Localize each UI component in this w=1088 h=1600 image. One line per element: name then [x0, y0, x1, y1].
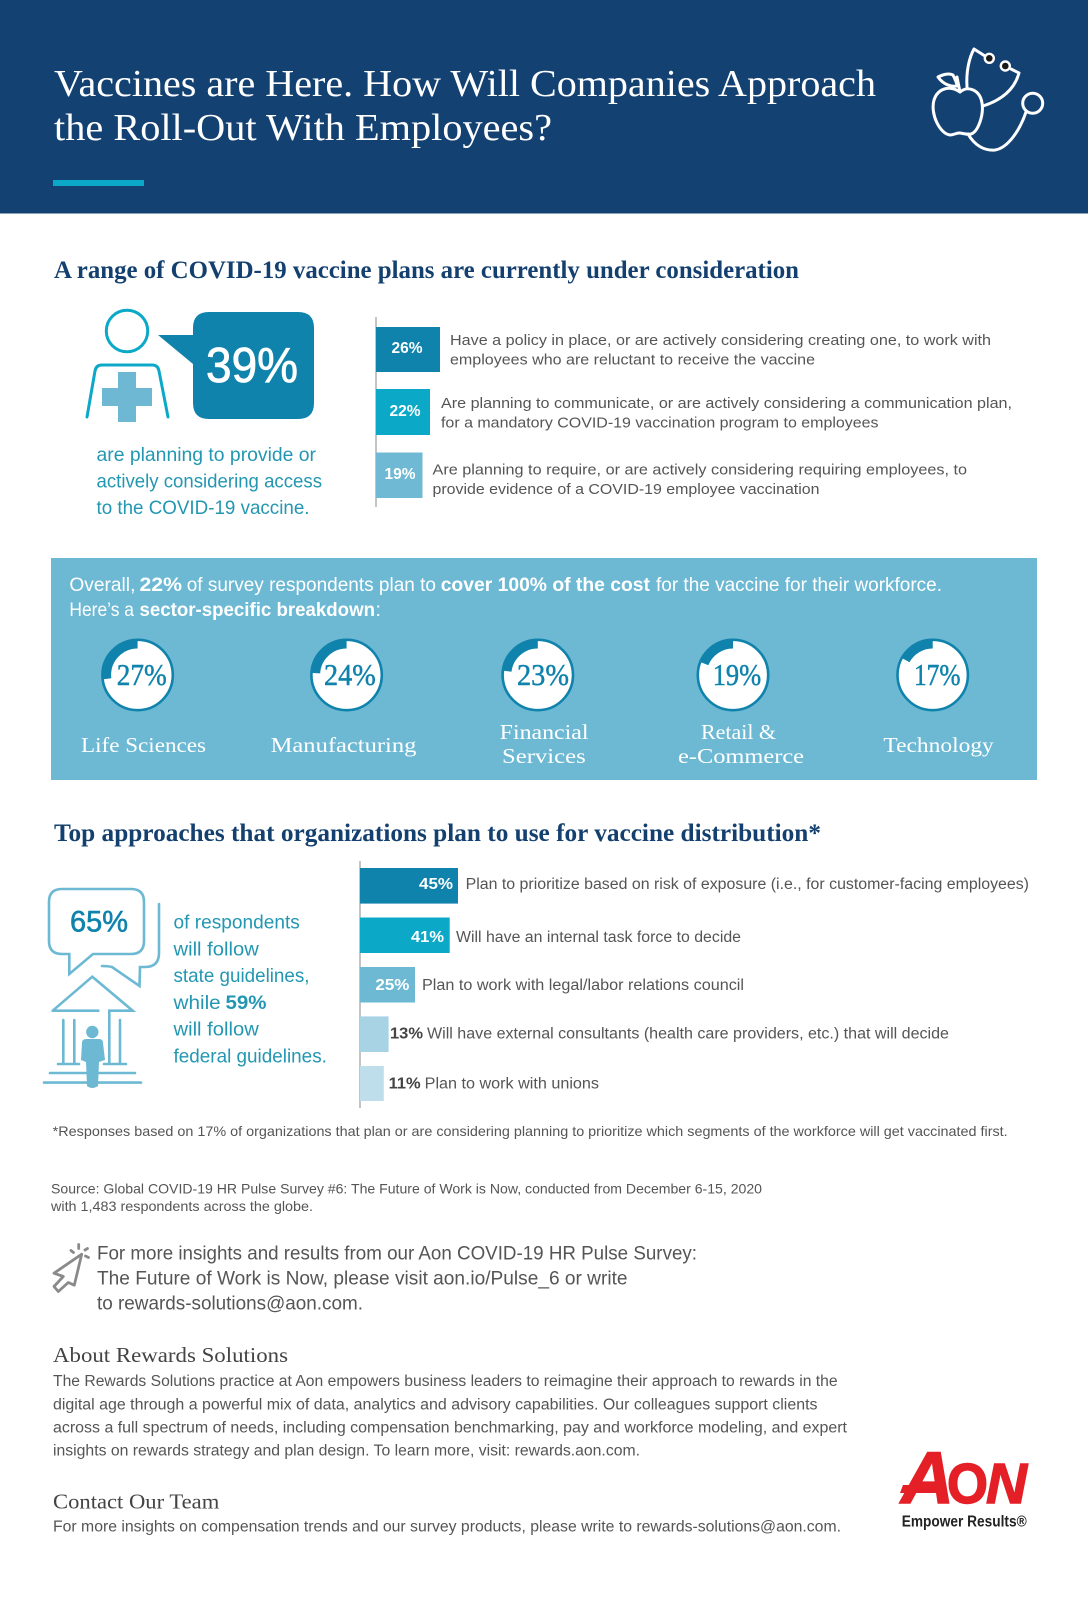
caption: access to vaccine: are planning to provide or	[96, 444, 316, 466]
panel: sector breakdown	[51, 558, 1037, 780]
logo: Aon Empower Results: O	[947, 1452, 988, 1516]
bar 22%: Are planning to communicate, or are actively considering a communication plan,	[441, 395, 1012, 412]
bar 22%: 22%	[389, 403, 421, 420]
donut: financial services 23%: Services	[502, 744, 586, 768]
callout: guidelines: federal guidelines.	[174, 1046, 327, 1068]
about text block: digital age through a powerful mix of data, analytics and advisory capabilities. Our colleagues support clients	[53, 1396, 818, 1413]
panel intro text: cover 100% of the cost	[441, 574, 650, 596]
logo: Aon Empower Results: Empower Results®	[902, 1514, 1027, 1531]
donut: technology 17%: 17%	[914, 657, 960, 692]
heading: about rewards solutions: About Rewards Solutions	[53, 1343, 288, 1367]
logo: Aon Empower Results: A	[899, 1438, 954, 1519]
logo: Aon Empower Results: N	[986, 1452, 1029, 1516]
bar 19%: 19%	[384, 466, 416, 483]
icon: person with cross and 39% speech bubble	[87, 310, 314, 422]
figure: person	[81, 1026, 105, 1088]
caption: access to vaccine	[96, 444, 322, 519]
bar 41%	[360, 918, 741, 953]
logo: Aon Empower Results	[899, 1438, 1029, 1531]
callout: guidelines: state guidelines,	[174, 965, 310, 987]
bar 41%: 41%	[411, 929, 444, 946]
bar 26%: 26%	[391, 340, 423, 357]
bar 22%	[376, 389, 1012, 435]
panel intro text: for the vaccine for their workforce.	[656, 574, 942, 596]
stat: 65%: 65%	[70, 906, 128, 938]
bar 25%	[360, 967, 744, 1002]
donut: manufacturing 24%: 24%	[324, 657, 376, 692]
callout: guidelines: will follow	[172, 1019, 260, 1041]
bar 11%: 11%	[389, 1076, 421, 1093]
about text block: insights on rewards strategy and plan design. To learn more, visit: rewards.aon.com.	[53, 1442, 640, 1459]
bar 41%: Will have an internal task force to decide	[456, 929, 741, 946]
heading: contact our team: Contact Our Team	[53, 1489, 220, 1513]
donut: manufacturing 24%	[271, 640, 417, 757]
call to action text: For more insights and results from our Aon COVID-19 HR Pulse Survey:	[97, 1242, 697, 1264]
donut: technology 17%: Technology	[883, 733, 994, 757]
source note	[50, 1180, 762, 1214]
heading: top approaches: Top approaches that organizations plan to use for vaccine distribution*	[54, 820, 821, 847]
bar 45%: 45%	[419, 876, 453, 893]
stat: 39%: 39%	[206, 339, 298, 393]
donut: financial services 23%	[500, 640, 589, 768]
callout: guidelines: while	[172, 992, 221, 1014]
bar 25%: 25%	[375, 977, 410, 994]
bar 13%: 13%	[390, 1026, 423, 1043]
bar 26%: employees who are reluctant to receive the vaccine	[450, 352, 815, 368]
caption: access to vaccine: actively considering access	[96, 470, 322, 492]
bar 11%: Plan to work with unions	[425, 1076, 599, 1093]
heading: vaccine plans: A range of COVID-19 vaccine plans are currently under consideration	[54, 257, 799, 284]
bar 45%: Plan to prioritize based on risk of exposure (i.e., for customer-facing employees)	[466, 876, 1029, 893]
bar 13%: Will have external consultants (health care providers, etc.) that will decide	[427, 1026, 949, 1043]
donut: life sciences 27%: Life Sciences	[81, 733, 206, 757]
icon: speech bubbles with 65% over government building	[44, 889, 159, 1088]
panel intro text	[69, 574, 942, 621]
donut: life sciences 27%	[81, 640, 206, 757]
panel intro text: 22%	[140, 574, 182, 596]
donut: retail and e-commerce 19%	[678, 640, 804, 768]
callout: guidelines: 59%	[226, 992, 266, 1014]
panel intro text: Overall,	[69, 574, 135, 596]
panel intro text: Here’s a	[69, 599, 134, 621]
about text block: across a full spectrum of needs, including compensation benchmarking, pay and workforce modeling, and expert	[53, 1420, 848, 1437]
footnote: *Responses based on 17% of organizations that plan or are considering planning to prioritize which segments of the workforce will get vaccinated first.	[53, 1123, 1008, 1139]
donut: retail and e-commerce 19%: 19%	[713, 657, 761, 692]
accent bar	[53, 180, 144, 186]
about text block	[53, 1373, 848, 1459]
icon: apple and stethoscope	[933, 49, 1043, 150]
icon: cursor click	[54, 1244, 88, 1292]
bar 45%	[360, 868, 1029, 904]
callout: guidelines: of respondents	[174, 912, 300, 934]
callout: guidelines	[172, 912, 327, 1068]
donut: financial services 23%: Financial	[500, 720, 589, 744]
panel intro text: of survey respondents plan to	[187, 574, 436, 596]
bar 19%: provide evidence of a COVID-19 employee vaccination	[432, 481, 820, 498]
title: Vaccines are Here. How Will Companies Approach	[54, 63, 876, 105]
bar list: vaccine plans	[375, 317, 1012, 507]
donut: retail and e-commerce 19%: Retail &	[701, 720, 776, 744]
bar 26%: Have a policy in place, or are actively considering creating one, to work with	[450, 332, 991, 349]
call to action text	[97, 1242, 697, 1314]
panel intro text: :	[376, 599, 381, 621]
bar chart: distribution approaches	[359, 861, 1029, 1108]
bar 11%	[360, 1066, 599, 1101]
source note: with 1,483 respondents across the globe.	[50, 1198, 313, 1214]
about text block: The Rewards Solutions practice at Aon empowers business leaders to reimagine their approach to rewards in the	[53, 1373, 838, 1390]
call to action text: to rewards-solutions@aon.com.	[97, 1292, 363, 1314]
panel intro text: sector-specific breakdown	[140, 599, 375, 621]
donut: retail and e-commerce 19%: e-Commerce	[678, 744, 804, 768]
bar 26%	[376, 327, 991, 372]
donut: life sciences 27%: 27%	[117, 657, 167, 692]
donut: technology 17%	[883, 640, 994, 757]
title	[54, 63, 876, 149]
bar 25%: Plan to work with legal/labor relations council	[422, 977, 744, 994]
contact text: For more insights on compensation trends and our survey products, please write to rewards-solutions@aon.com.	[53, 1519, 841, 1536]
bar 22%: for a mandatory COVID-19 vaccination program to employees	[441, 414, 878, 432]
bar 19%	[376, 452, 967, 498]
call to action text: The Future of Work is Now, please visit aon.io/Pulse_6 or write	[97, 1267, 628, 1289]
donut: financial services 23%: 23%	[517, 657, 569, 692]
bar 13%	[360, 1016, 949, 1052]
donut: manufacturing 24%: Manufacturing	[271, 733, 417, 757]
bar 19%: Are planning to require, or are actively considering requiring employees, to	[432, 462, 967, 478]
source note: Source: Global COVID-19 HR Pulse Survey #6: The Future of Work is Now, conducted from December 6-15, 2020	[51, 1180, 762, 1196]
callout: guidelines: will follow	[172, 938, 260, 960]
header band	[0, 0, 1088, 214]
title: the Roll-Out With Employees?	[54, 107, 552, 149]
caption: access to vaccine: to the COVID-19 vaccine.	[96, 497, 310, 519]
